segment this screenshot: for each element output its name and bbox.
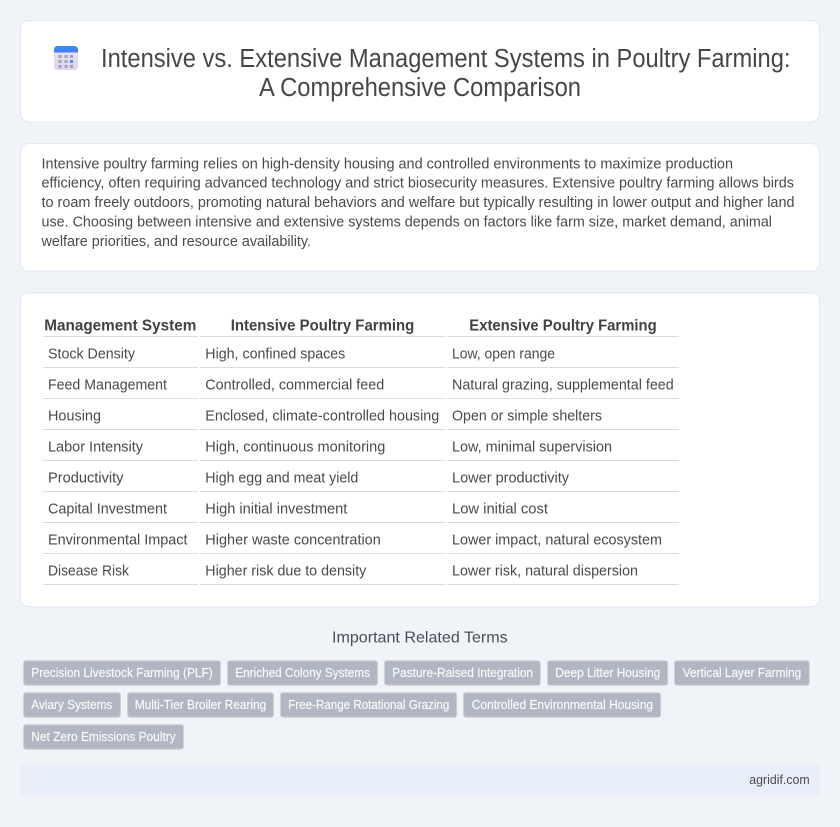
row: housing: Enclosed, climate-controlled housing (205, 408, 439, 424)
table header: Management System (44, 318, 196, 334)
table header (44, 318, 657, 334)
row: productivity: High egg and meat yield (205, 470, 358, 486)
row: feed management: Natural grazing, supplemental feed (452, 377, 674, 393)
title: A Comprehensive Comparison (259, 74, 581, 102)
intro text: use. Choosing between intensive and extensive systems depends on factors like farm size, market demand, animal (42, 214, 772, 230)
tag: Free-Range Rotational Grazing (288, 698, 449, 712)
title (101, 45, 790, 102)
intro text: efficiency, often requiring advanced technology and strict biosecurity measures. Extensive poultry farming allows birds (42, 176, 794, 192)
icon: calendar (54, 46, 78, 70)
footer bar (20, 763, 820, 797)
row: capital investment (48, 501, 548, 517)
intro text: to roam freely outdoors, promoting natural behaviors and welfare but typically resulting in lower output and higher land (42, 195, 794, 211)
tag: Aviary Systems (31, 698, 112, 712)
row: productivity (48, 470, 570, 486)
tag: Multi-Tier Broiler Rearing (135, 698, 266, 712)
intro text (41, 156, 794, 250)
row: labor intensity: Low, minimal supervision (452, 439, 612, 455)
row: stock density: Stock Density (48, 346, 136, 362)
row: feed management: Controlled, commercial feed (205, 377, 384, 393)
tag: Vertical Layer Farming (683, 666, 801, 680)
tag (548, 661, 668, 685)
tag: Enriched Colony Systems (235, 666, 370, 680)
row: environmental impact (48, 532, 662, 548)
tag (280, 693, 457, 717)
title: Intensive vs. Extensive Management Systems in Poultry Farming: (101, 45, 790, 73)
row: stock density (48, 346, 555, 362)
row: disease risk: Higher risk due to density (205, 563, 367, 579)
tag: Deep Litter Housing (555, 666, 660, 680)
tag: Pasture-Raised Integration (392, 666, 533, 680)
table grid lines (43, 336, 679, 584)
footer source: agridif.com (749, 772, 810, 787)
row: stock density: Low, open range (452, 346, 555, 362)
row: capital investment: High initial investment (205, 501, 347, 517)
intro text: welfare priorities, and resource availability. (41, 234, 311, 250)
row: productivity: Productivity (48, 470, 124, 486)
table header: Intensive Poultry Farming (231, 318, 414, 334)
intro text: Intensive poultry farming relies on high-density housing and controlled environments to maximize production (42, 156, 733, 172)
tag: Controlled Environmental Housing (472, 698, 653, 712)
row: environmental impact: Lower impact, natural ecosystem (452, 532, 662, 548)
tag (228, 661, 378, 685)
row: housing: Open or simple shelters (452, 408, 602, 424)
row: labor intensity: Labor Intensity (48, 439, 144, 455)
tag (24, 693, 120, 717)
tag (384, 661, 540, 685)
tag (674, 661, 809, 685)
row: productivity: Lower productivity (452, 470, 570, 486)
tag: Net Zero Emissions Poultry (31, 730, 176, 744)
tag (128, 693, 274, 717)
row: capital investment: Low initial cost (452, 501, 548, 517)
row: labor intensity (48, 439, 612, 455)
tag (464, 693, 661, 717)
row: labor intensity: High, continuous monitoring (205, 439, 385, 455)
row: capital investment: Capital Investment (48, 501, 167, 517)
row: environmental impact: Environmental Impact (48, 532, 188, 548)
panel: related term tags (24, 661, 809, 749)
row: feed management: Feed Management (48, 377, 167, 393)
table header: Extensive Poultry Farming (469, 318, 657, 334)
row: disease risk (48, 563, 638, 579)
panel: header (20, 20, 820, 122)
tag (24, 725, 184, 749)
tag: Precision Livestock Farming (PLF) (31, 666, 213, 680)
row: housing: Housing (48, 408, 101, 424)
panel: introduction (20, 144, 820, 271)
panel: comparison table (20, 293, 820, 607)
row: disease risk: Disease Risk (48, 563, 130, 579)
tag (24, 661, 220, 685)
heading: important related terms: Important Related Terms (332, 630, 508, 647)
row: disease risk: Lower risk, natural dispersion (452, 563, 638, 579)
row: environmental impact: Higher waste concentration (205, 532, 381, 548)
row: stock density: High, confined spaces (205, 346, 345, 362)
row: housing (48, 408, 602, 424)
row: feed management (48, 377, 674, 393)
